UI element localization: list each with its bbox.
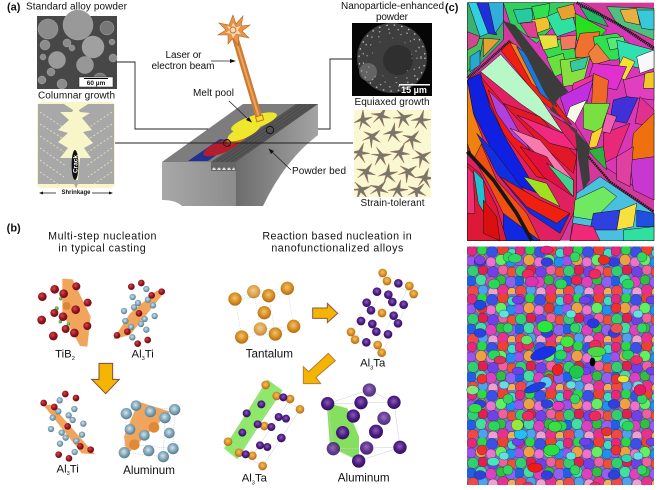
heading: reaction based nucleation: nanofunctionalized alloys (271, 243, 403, 255)
melt pool ellipses (201, 108, 279, 160)
shrinkage dimension arrow (39, 190, 113, 196)
marker circles (224, 126, 274, 146)
label: Al3Ti upper: 3 (142, 356, 145, 362)
shrinkage dimension arrow: Shrinkage (61, 190, 91, 196)
label: Al3Ta lower: 3 (252, 480, 255, 486)
label: Al3Ta upper: Al (360, 358, 370, 370)
micrograph: nanoparticle-enhanced powder: 15 µm (401, 85, 427, 95)
panel label a: (a) (7, 2, 21, 14)
panel: b, reaction based nucleation (224, 230, 418, 486)
heading: reaction based nucleation: Reaction based nucleation in (262, 230, 412, 242)
heading: nanoparticle-enhanced powder: powder (376, 12, 409, 23)
central fan grains (467, 41, 577, 241)
crystal: TiB2 (37, 279, 92, 347)
arrow: down (92, 363, 119, 394)
panel: b, typical casting nucleation (7, 223, 180, 477)
connector: standard powder to melt pool (117, 59, 352, 129)
crystal: Al3Ta upper (347, 269, 418, 357)
label: melt pool (193, 88, 252, 122)
crystal: aluminum, orange plane (119, 400, 180, 462)
heading: nanoparticle-enhanced powder (341, 1, 444, 23)
dark weld seam (503, 21, 590, 190)
connector: nanoparticle strain image line (115, 142, 353, 144)
powder bed block (162, 104, 318, 206)
micrograph: nanoparticle-enhanced powder (352, 23, 432, 96)
heading: reaction based nucleation (262, 230, 412, 255)
panel: c, equiaxed grain orientation map (467, 246, 654, 485)
label: melt pool: Melt pool (193, 88, 234, 99)
label: TiB2: TiB (55, 348, 72, 360)
label: Al3Ti lower: Ti (70, 463, 79, 475)
label: Al3Ta upper: 3 (370, 365, 373, 371)
heading: multi-step nucleation: in typical casting (58, 243, 146, 255)
crystal: tantalum (228, 282, 300, 344)
illustration: columnar dendrites with crack: Crack (72, 155, 80, 173)
illustration: strain-tolerant equiaxed dendrites (354, 110, 431, 197)
label: laser or electron beam (152, 50, 236, 72)
bottom-right grains (570, 177, 654, 241)
illustration: columnar dendrites with crack (37, 102, 115, 188)
micrograph: standard alloy powder: 60 µm (87, 80, 105, 87)
caption: columnar growth: Columnar growth (38, 90, 115, 102)
arrow: diagonal down-left (303, 353, 335, 384)
label: Al3Ta upper: Ta (373, 358, 386, 370)
larger grains (467, 246, 646, 472)
black void (590, 358, 595, 366)
heading: standard alloy powder: Standard alloy powder (26, 2, 128, 12)
crystal: Al3Ti upper (113, 280, 165, 347)
label: laser or electron beam: electron beam (152, 61, 214, 72)
micrograph: standard alloy powder (37, 10, 117, 89)
label: Al3Ti upper: Ti (145, 348, 154, 360)
arrow: right (313, 303, 338, 323)
panel: c, columnar grain orientation map (467, 3, 654, 241)
laser beam with star source (218, 15, 264, 122)
top-left grains (467, 3, 503, 77)
heading: multi-step nucleation: Multi-step nucleation (48, 230, 157, 242)
caption: equiaxed growth: Equiaxed growth (354, 97, 430, 108)
label: tantalum: Tantalum (246, 347, 293, 360)
crystal: Al3Ti lower (40, 391, 95, 462)
label: powder bed: Powder bed (292, 166, 346, 177)
label: aluminum: Aluminum (123, 464, 175, 477)
label: aluminum: Aluminum (338, 472, 390, 485)
caption: strain-tolerant: Strain-tolerant (360, 198, 425, 209)
label: Al3Ta lower: Ta (255, 473, 268, 485)
crystal: aluminum, green plane (321, 383, 407, 468)
panel label b: (b) (7, 223, 21, 235)
label: Al3Ti lower: 3 (67, 471, 70, 477)
upper mosaic grains (503, 3, 654, 200)
panel label c: (c) (445, 2, 459, 14)
heading: nanoparticle-enhanced powder: Nanoparticle-enhanced (341, 1, 444, 12)
label: TiB2: 2 (72, 356, 75, 362)
heading: multi-step nucleation (48, 230, 157, 255)
dark grain boundaries (467, 3, 654, 241)
panel: a, additive manufacturing schematic (7, 1, 459, 209)
label: powder bed (268, 148, 346, 177)
crystal: Al3Ta lower, green plane (224, 379, 304, 470)
label: laser or electron beam: Laser or (166, 50, 202, 61)
label: Al3Ti upper: Al (132, 348, 142, 360)
label: Al3Ti lower: Al (57, 463, 67, 475)
label: Al3Ta lower: Al (242, 473, 252, 485)
